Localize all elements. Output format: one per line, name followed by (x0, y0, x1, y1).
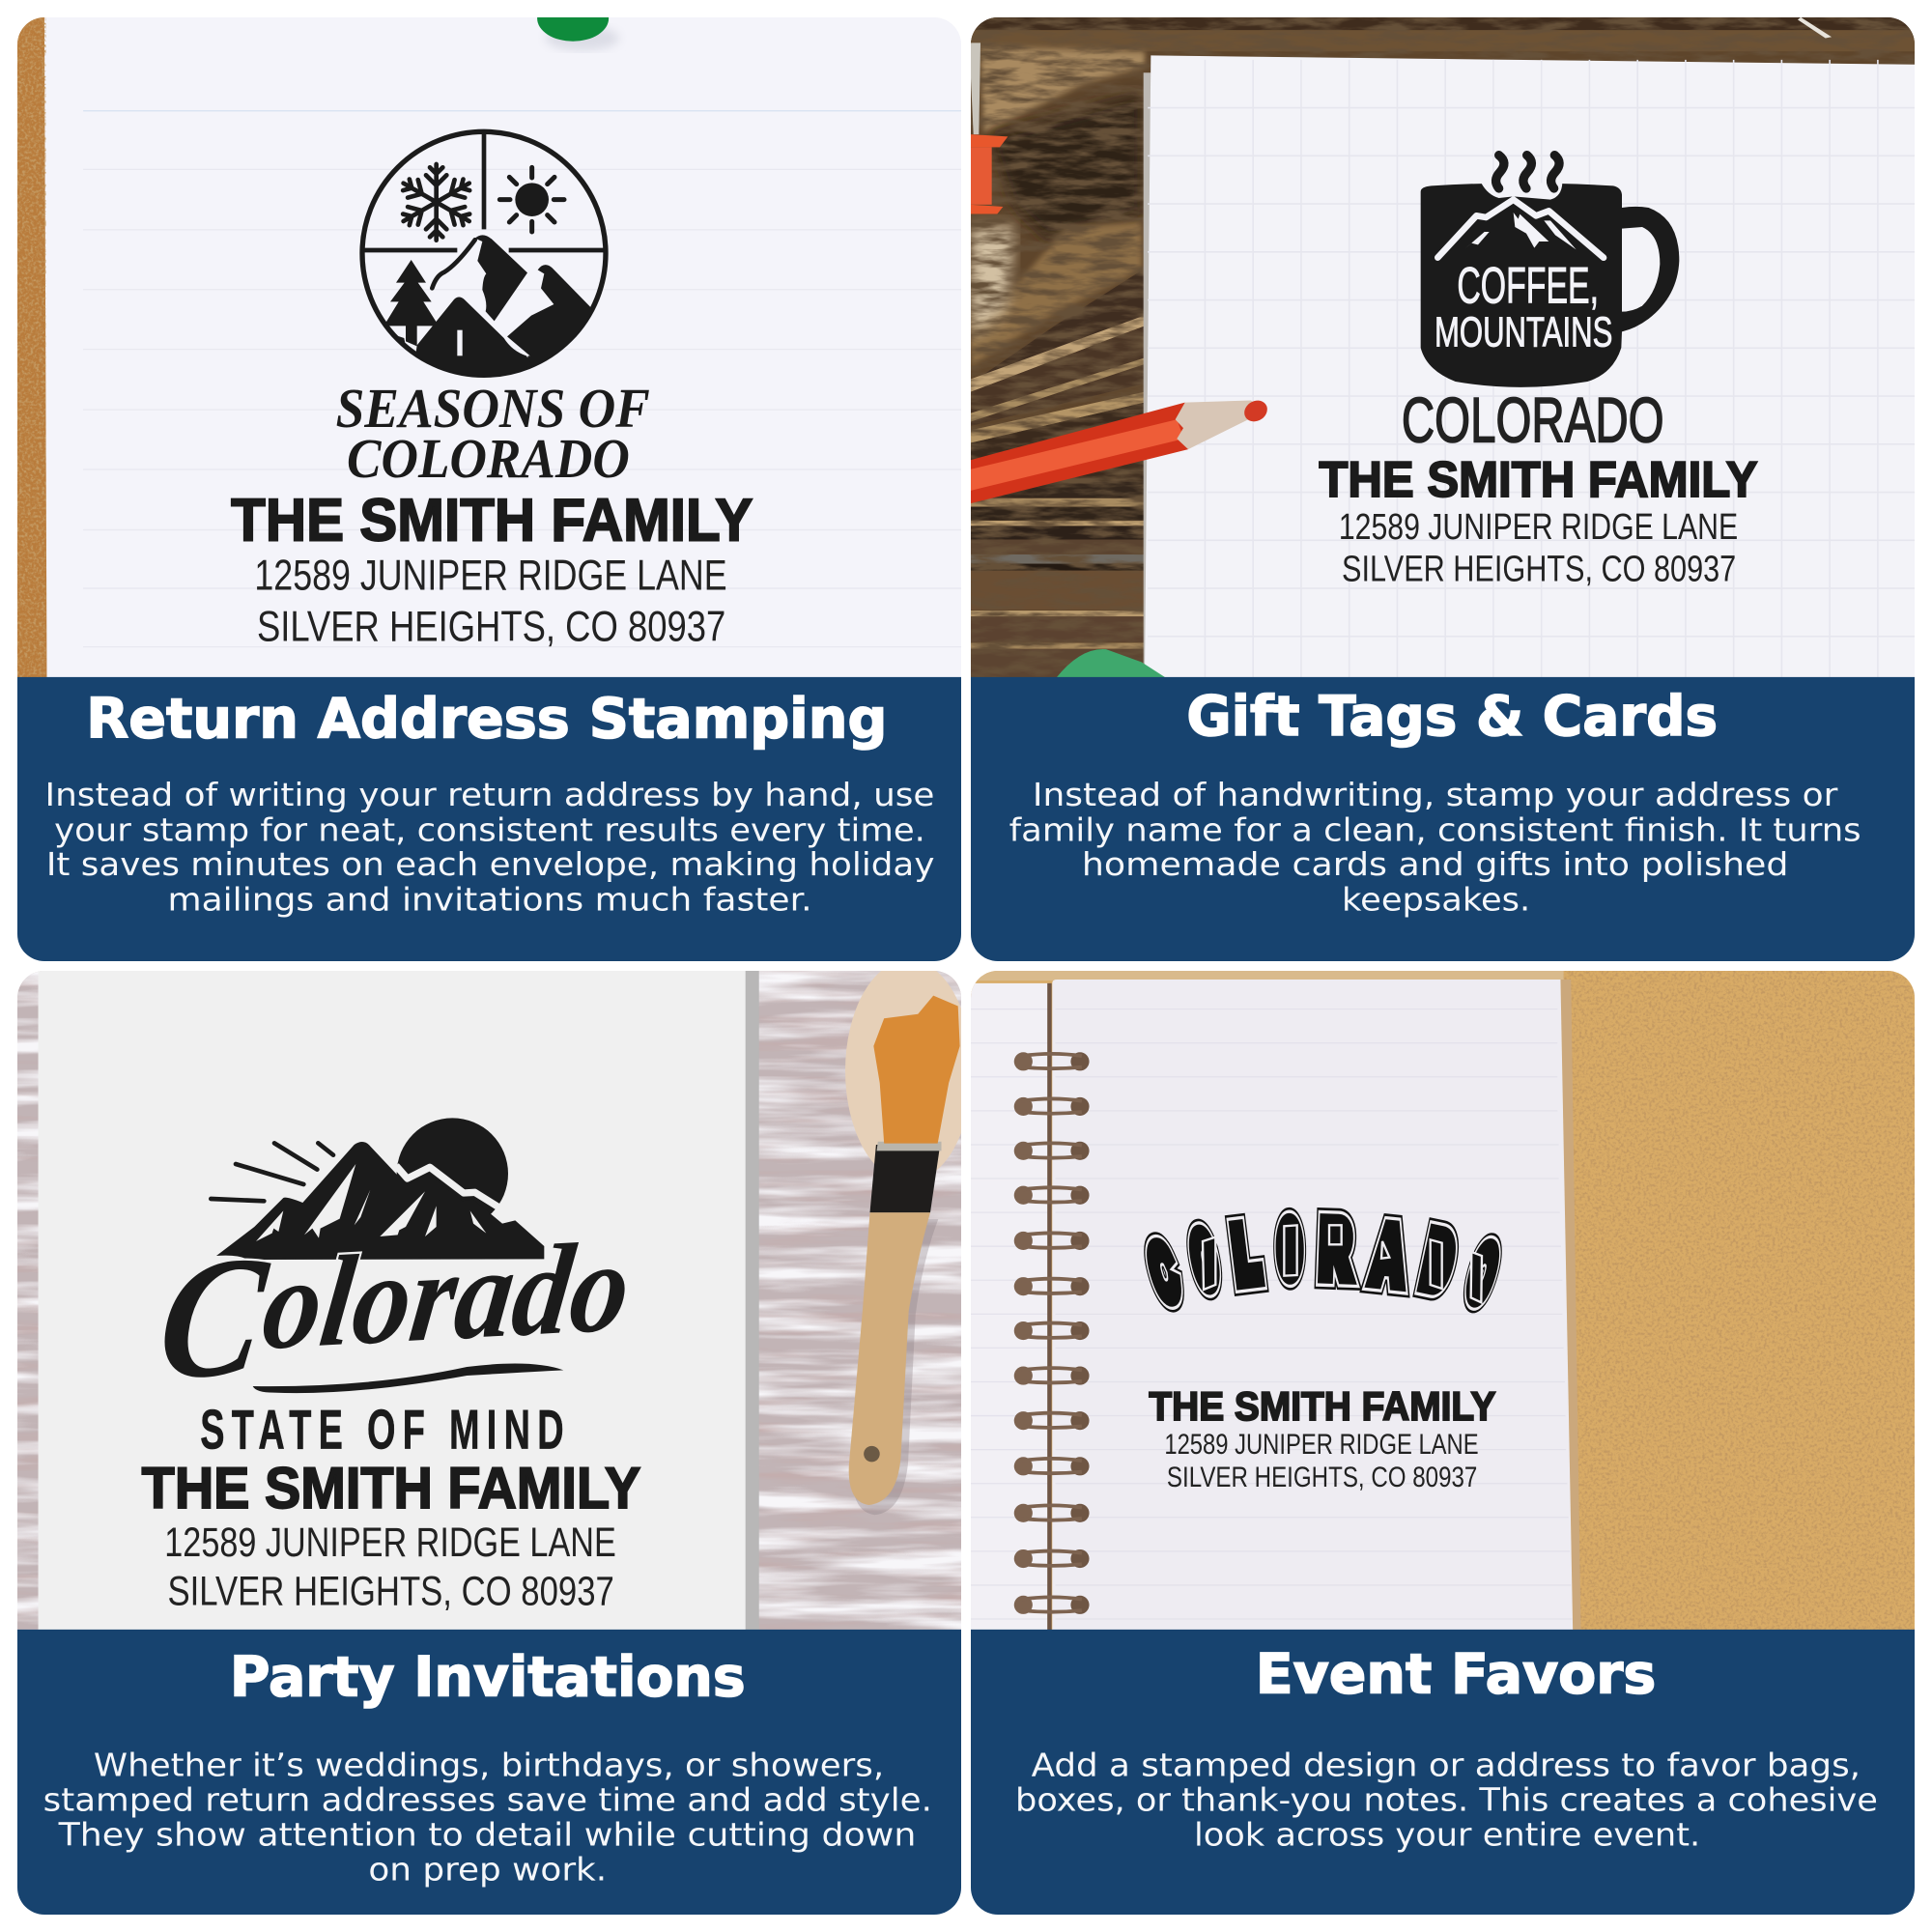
stamp text: SILVER HEIGHTS, CO 80937 (1167, 1462, 1477, 1493)
caption band: your stamp for neat, consistent results every time. (54, 811, 925, 849)
caption band: stamped return addresses save time and add style. (43, 1780, 932, 1818)
photo: spiral notebook on cork (966, 966, 1927, 1632)
panel: party invitations (13, 960, 972, 1919)
stamp: arched varsity word: R (1320, 1208, 1351, 1293)
stamp: arched varsity word: L (1230, 1210, 1264, 1298)
stamp text: 12589 JUNIPER RIDGE LANE (254, 552, 727, 599)
caption band: It saves minutes on each envelope, making holiday (46, 845, 934, 883)
caption band: Party Invitations (230, 1645, 746, 1710)
green push pin (537, 17, 618, 52)
stamp text: SILVER HEIGHTS, CO 80937 (1342, 548, 1736, 588)
icon: pine tree (384, 260, 438, 346)
stamp text: 12589 JUNIPER RIDGE LANE (1339, 506, 1738, 547)
caption band: Instead of handwriting, stamp your address or (1033, 776, 1838, 813)
stamp: arched varsity word: C (1141, 1228, 1186, 1317)
stamp text: THE SMITH FAMILY (142, 1455, 640, 1520)
stamp: arched varsity word: L (1230, 1210, 1264, 1298)
stamp: arched varsity word: O (1277, 1207, 1302, 1292)
paint spoon and brush (845, 960, 972, 1515)
caption band: They show attention to detail while cutting down (57, 1816, 916, 1854)
stamp text: 12589 JUNIPER RIDGE LANE (164, 1520, 616, 1566)
stamp text (1149, 1383, 1495, 1493)
stamp: arched varsity word: A (1370, 1210, 1408, 1299)
stamp text (231, 377, 753, 650)
cork strip (17, 17, 46, 677)
stamp: arched varsity word: R (1320, 1208, 1351, 1293)
stamp: arched varsity word: O (1185, 1216, 1224, 1304)
red push pin (969, 43, 1008, 214)
stamp text: STATE OF MIND (200, 1400, 564, 1461)
stamp: arched varsity word: O (1460, 1229, 1505, 1318)
caption band (13, 1630, 967, 1919)
stamp text: 12589 JUNIPER RIDGE LANE (1164, 1429, 1479, 1461)
stamp: arched varsity word (1141, 1207, 1505, 1318)
stamp: arched varsity word: D (1416, 1217, 1460, 1306)
caption band (966, 1630, 1927, 1919)
stamp text: THE SMITH FAMILY (1149, 1383, 1495, 1429)
stamp: arched varsity word: O (1277, 1207, 1302, 1292)
caption band: mailings and invitations much faster. (167, 881, 812, 919)
caption band: Event Favors (1256, 1642, 1656, 1707)
stamp text (142, 1400, 640, 1614)
script word: C (150, 1219, 277, 1416)
stamp text: SEASONS OF (336, 377, 650, 440)
stamp text: THE SMITH FAMILY (231, 486, 753, 554)
stamp text: THE SMITH FAMILY (1319, 451, 1758, 507)
caption band: Gift Tags & Cards (1186, 684, 1718, 749)
stamp: arched varsity word: A (1370, 1210, 1408, 1299)
stamp logo: mountain and sun (164, 1118, 625, 1393)
stamp: arched varsity word: O (1277, 1207, 1302, 1292)
stamp logo: seasons circle (362, 131, 606, 380)
stamp: arched varsity word: O (1460, 1229, 1505, 1318)
panel: return address stamping (0, 0, 985, 967)
caption band: homemade cards and gifts into polished (1082, 845, 1788, 883)
caption band: on prep work. (368, 1850, 607, 1888)
icon: mountain outline (1437, 200, 1604, 258)
icon: mountains (398, 235, 591, 373)
spiral binding rings (1014, 1052, 1090, 1614)
stamp: arched varsity word: O (1185, 1216, 1224, 1304)
caption band: Instead of writing your return address by hand, use (45, 776, 934, 813)
rays (211, 1143, 333, 1201)
photo: burnt wood table (968, 17, 1932, 681)
panel: gift tags and cards (966, 17, 1932, 967)
panel: event favors (966, 966, 1927, 1919)
stamp: arched varsity word: R (1320, 1208, 1351, 1293)
icon: sun (499, 167, 564, 232)
stamp text: SILVER HEIGHTS, CO 80937 (167, 1568, 614, 1614)
caption band: family name for a clean, consistent finish. It turns (1009, 811, 1861, 849)
stamp logo: coffee mug (1421, 156, 1679, 387)
notepaper with grid (1144, 17, 1932, 678)
stamp text: SILVER HEIGHTS, CO 80937 (257, 603, 725, 650)
stamp text: COLORADO (1402, 384, 1664, 455)
stamp: arched varsity word: C (1141, 1228, 1186, 1317)
caption band: Whether it’s weddings, birthdays, or showers, (94, 1747, 884, 1784)
stamp: arched varsity word: O (1185, 1216, 1224, 1304)
photo: card on whitewashed wood (13, 960, 972, 1632)
caption band: look across your entire event. (1194, 1816, 1700, 1854)
stamp text (1319, 384, 1758, 588)
caption band: boxes, or thank-you notes. This creates a cohesive (1015, 1780, 1878, 1818)
caption band (966, 677, 1927, 967)
stamp: arched varsity word: D (1416, 1217, 1460, 1306)
stamp: arched varsity word: C (1141, 1228, 1186, 1317)
red pencil and green marker (971, 398, 1268, 679)
icon: snowflake (398, 164, 474, 241)
stamp: arched varsity word: L (1230, 1210, 1264, 1298)
stamp: arched varsity word: D (1416, 1217, 1460, 1306)
stamp: arched varsity word: A (1370, 1210, 1408, 1299)
script word: olorado (256, 1214, 638, 1378)
stamp logo: coffee mug: MOUNTAINS (1435, 309, 1612, 355)
stamp: arched varsity word: O (1460, 1229, 1505, 1318)
stamp logo: coffee mug: COFFEE, (1457, 257, 1599, 314)
photo: lined paper on cork board (0, 0, 985, 678)
icon: steam (1496, 156, 1559, 188)
caption band: Add a stamped design or address to favor bags, (1032, 1747, 1861, 1784)
caption band (13, 677, 967, 967)
stamp text: COLORADO (347, 427, 630, 490)
caption band: keepsakes. (1342, 881, 1530, 919)
caption band: Return Address Stamping (86, 686, 887, 751)
